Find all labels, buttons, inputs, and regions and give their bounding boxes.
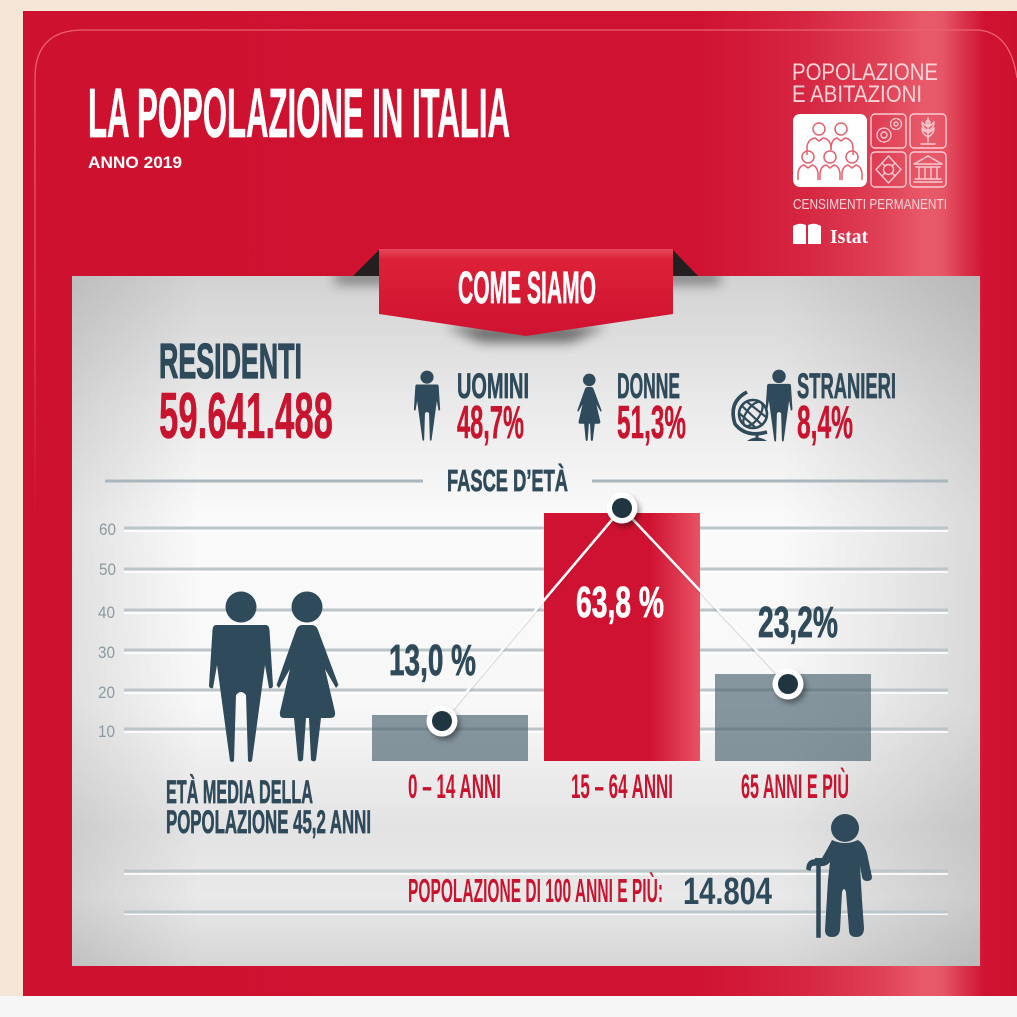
- icon: gears tile: [871, 114, 906, 148]
- logo caption: CENSIMENTI PERMANENTI: [793, 196, 947, 213]
- stat: foreigners: [797, 367, 896, 448]
- y axis labels: 60: [99, 520, 116, 539]
- stat: women: 51,3%: [617, 396, 686, 448]
- age bands heading: FASCE D’ETÀ: [447, 463, 568, 498]
- icon: man: [414, 371, 440, 441]
- y axis labels: 30: [98, 643, 115, 662]
- y axis labels: 40: [98, 603, 115, 622]
- icon: globe and person: [733, 370, 792, 441]
- average age text: ETÀ MEDIA DELLA: [166, 774, 313, 810]
- ribbon: come siamo: [353, 249, 698, 336]
- icon: wheat tile: [910, 114, 946, 148]
- stat: men: [457, 367, 529, 448]
- istat mark: Istat: [830, 226, 868, 248]
- y axis labels: [98, 520, 116, 741]
- logo: censimenti permanenti: [792, 59, 947, 248]
- istat mark: [793, 224, 868, 248]
- bar: 65+: [715, 674, 871, 761]
- stat: foreigners: 8,4%: [797, 396, 853, 448]
- marker: 65+: [772, 668, 806, 703]
- stat: women: [617, 367, 686, 448]
- centenarians number: 14.804: [683, 871, 772, 913]
- icon: temple tile: [910, 152, 946, 187]
- subtitle: year: ANNO 2019: [88, 153, 182, 172]
- rounded outline: [35, 30, 1017, 520]
- bar: 0-14: [372, 715, 528, 761]
- residents number: 59.641.488: [159, 379, 333, 452]
- icon: ring tile: [871, 152, 906, 187]
- text: LA POPOLAZIONE IN ITALIA: [88, 74, 510, 152]
- chart: age bands: 15 – 64 ANNI: [571, 768, 673, 806]
- ribbon: come siamo: COME SIAMO: [458, 262, 596, 313]
- chart: age bands: [98, 492, 948, 914]
- y axis labels: 50: [99, 560, 116, 579]
- text: POPOLAZIONE DI 100 ANNI E PIÙ:: [408, 872, 663, 909]
- marker: 15-64: [606, 492, 640, 527]
- logo heading: E ABITAZIONI: [792, 81, 922, 108]
- icon: couple: [209, 592, 338, 762]
- stat: men: UOMINI: [457, 367, 529, 406]
- trend line shadow: [442, 509, 788, 723]
- stat: foreigners: STRANIERI: [797, 367, 896, 406]
- panel: come siamo: [72, 276, 980, 966]
- panel background: [72, 276, 980, 966]
- average age text: [166, 774, 371, 840]
- residents heading: RESIDENTI: [159, 335, 302, 389]
- stat: women: DONNE: [617, 367, 680, 406]
- value: 63,8 %: 63,8 %: [576, 578, 664, 627]
- chart: age bands: 65 ANNI E PIÙ: [741, 768, 849, 806]
- y axis gridlines: [124, 528, 948, 914]
- bottom white strip: [0, 996, 1017, 1017]
- icon: elderly person: [807, 814, 872, 937]
- trend line: [442, 508, 788, 721]
- value: 23,2%: 23,2%: [758, 598, 838, 647]
- marker: 0-14: [426, 706, 460, 740]
- label: 0-14: 0 – 14 ANNI: [408, 768, 501, 806]
- panel side shading: [72, 276, 980, 966]
- value: 13,0 %: 13,0 %: [389, 636, 476, 685]
- bar: 15-64: [544, 513, 700, 761]
- logo heading: [792, 59, 938, 108]
- logo heading: POPOLAZIONE: [792, 59, 938, 86]
- y axis labels: 20: [98, 683, 115, 702]
- stat: men: 48,7%: [457, 396, 524, 448]
- icon: population tile: [793, 114, 867, 187]
- y axis labels: 10: [98, 722, 115, 741]
- average age text: POPOLAZIONE 45,2 ANNI: [166, 804, 371, 840]
- icon: woman: [577, 374, 602, 441]
- ribbon shadows: [335, 272, 720, 342]
